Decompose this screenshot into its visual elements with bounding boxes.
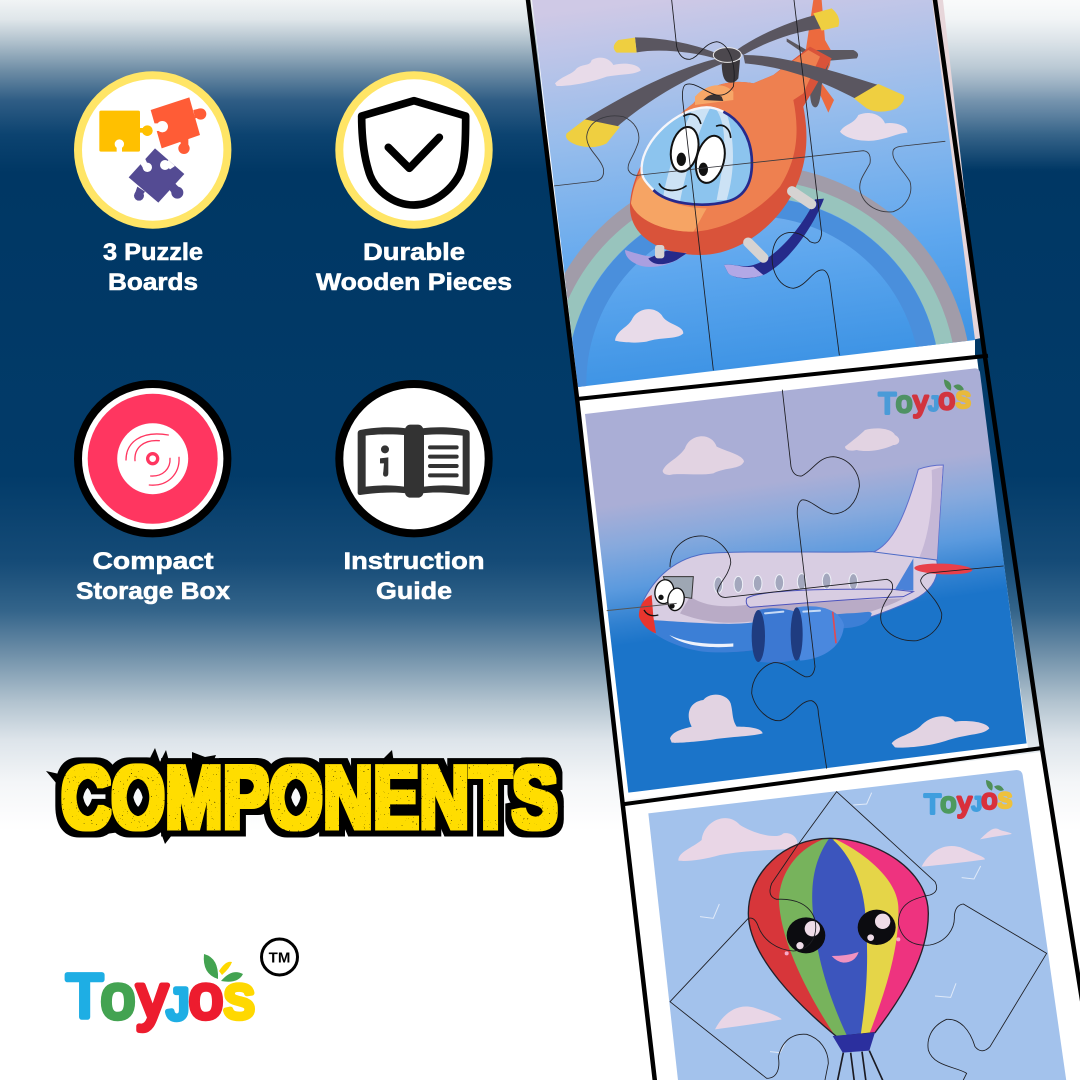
panel: airplane puzzle [577,355,1028,800]
label: Instruction Guide: Guide [376,578,452,605]
label: Durable Wooden Pieces: Durable [363,239,465,266]
label: 3 Puzzle Boards: Boards [108,269,198,296]
birds [700,793,981,1053]
label: Compact Storage Box: Storage Box [76,578,231,605]
icon: logo leaves [204,954,243,982]
belly [652,612,872,652]
label: Durable Wooden Pieces: Wooden Pieces [316,269,512,296]
icon: storage disc [78,384,227,533]
printed logo [924,780,1012,819]
face [670,126,700,173]
clouds [663,428,989,748]
printed logo: o [982,784,997,815]
red piece [151,97,206,154]
logo: Toyjos: o [189,963,223,1031]
windows [714,573,858,593]
printed logo: o [941,787,956,818]
puzzle cut lines [672,0,734,370]
printed logo: s [998,782,1012,813]
face [663,577,693,598]
balloon face [787,917,825,953]
puzzle cut lines [752,390,859,768]
panel: hot air balloon puzzle [625,752,1080,1080]
film strip frame lines [528,0,1080,1080]
skids [625,250,687,267]
purple piece [129,148,184,203]
printed logo: T [924,788,941,819]
heading: COMPONENTS: COMPONENTS [61,747,558,847]
label: Instruction Guide [344,548,484,605]
rainbow [564,170,968,387]
label: 3 Puzzle Boards [103,239,203,296]
label: 3 Puzzle Boards: 3 Puzzle [103,239,203,266]
printed logo: J [929,393,939,416]
balloon [747,837,933,1040]
printed logo: J [972,795,982,816]
icon: puzzle boards [78,75,227,225]
yellow piece [99,111,153,152]
wing [746,589,913,607]
printed logo [878,379,971,420]
engines [758,608,800,663]
logo: Toyjos: s [224,963,254,1031]
printed logo: T [878,387,896,420]
panel: helicopter puzzle [532,0,980,396]
printed logo: o [896,386,912,419]
fuselage [640,552,937,651]
label: Compact Storage Box [76,548,231,605]
label: Durable Wooden Pieces [316,239,512,296]
icon: shield with check [339,75,489,225]
tail [803,0,834,113]
label: Instruction Guide: Instruction [344,548,484,575]
logo: Toyjos: o [101,963,135,1031]
logo: Toyjos: T [66,962,103,1030]
icon: instruction book [339,384,489,533]
cockpit window [642,107,752,205]
printed logo: o [939,383,955,416]
helicopter body [630,47,832,255]
printed logo: s [956,382,971,415]
printed logo: y [958,787,972,818]
clouds [555,58,907,343]
label: Compact Storage Box: Compact [92,548,214,575]
printed logo: y [913,385,928,418]
logo: Toyjos: J [167,980,189,1029]
logo: Toyjos: y [137,963,168,1031]
trademark badge [262,939,298,975]
rotor [722,60,740,83]
nose [639,595,656,633]
stabilizer [914,563,972,575]
puzzle cut lines [670,792,837,1080]
trademark badge: TM [269,950,290,966]
tail fin [870,465,943,577]
logo: Toyjos [66,954,254,1031]
clouds [678,818,1012,1029]
